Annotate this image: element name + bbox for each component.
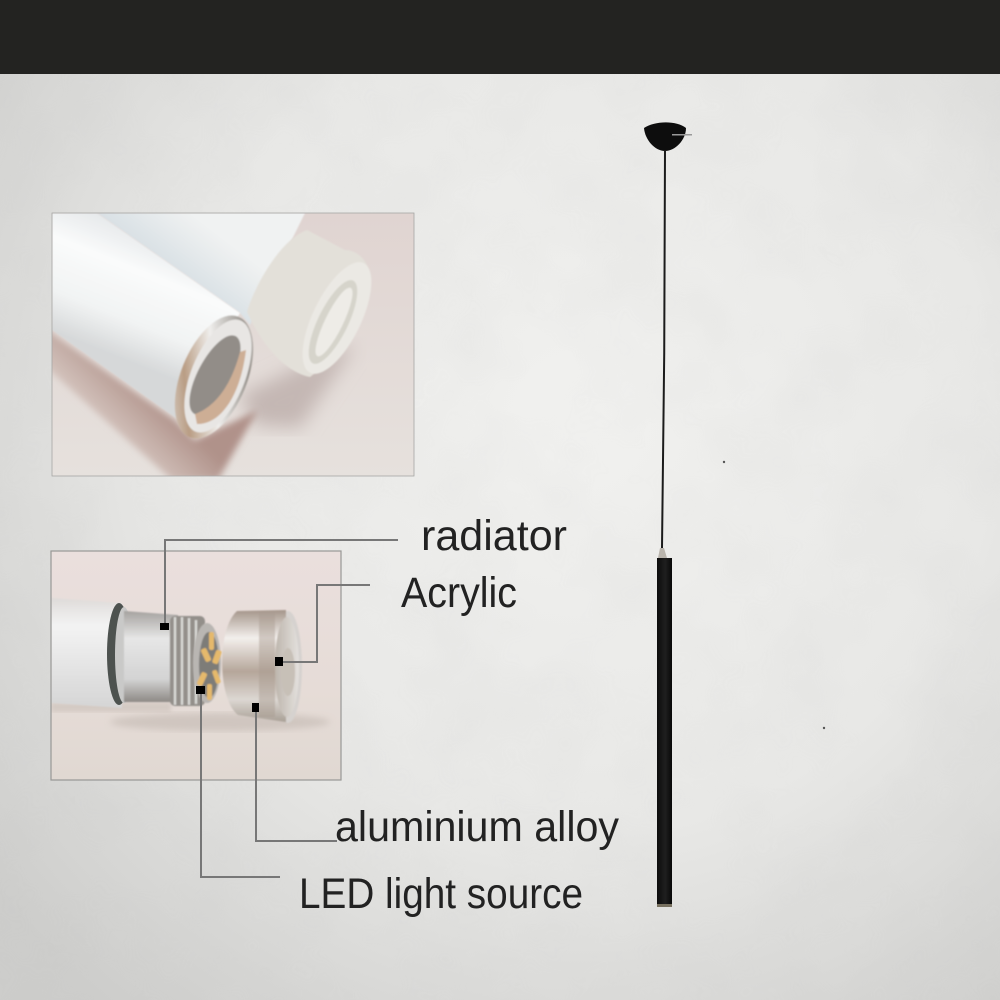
- photo: disassembled lamp parts: [51, 551, 341, 780]
- chrome ring: [174, 314, 254, 438]
- tube body: [657, 558, 672, 907]
- label: radiator: radiator: [421, 512, 567, 560]
- callout leader: aluminium alloy: [252, 703, 337, 841]
- frosted acrylic cover: [248, 231, 372, 378]
- label: aluminium alloy: aluminium alloy: [335, 803, 619, 851]
- photo 1 frame: [52, 213, 414, 476]
- radiator: [124, 611, 178, 702]
- LED board: [193, 623, 222, 703]
- label: Acrylic: Acrylic: [401, 569, 517, 617]
- callout leader: LED light source: [196, 686, 280, 877]
- black seal: [107, 603, 124, 705]
- photo 2 frame: [51, 551, 341, 780]
- top dark band: [0, 0, 1000, 74]
- front white tube: [52, 213, 240, 418]
- rear tube: [97, 213, 305, 325]
- label: LED light source: LED light source: [299, 870, 583, 918]
- aluminium cap: [222, 610, 302, 723]
- pendant lamp: [644, 122, 692, 907]
- white tube: [51, 598, 122, 708]
- tube shadows: [240, 345, 355, 428]
- callout leader: radiator: [160, 540, 398, 630]
- cord clamp: [658, 548, 667, 558]
- callout leader: acrylic: [275, 585, 370, 666]
- photo: lamp tube with frosted acrylic cover: [40, 213, 414, 480]
- ceiling canopy: [644, 122, 686, 151]
- cord: [662, 150, 665, 548]
